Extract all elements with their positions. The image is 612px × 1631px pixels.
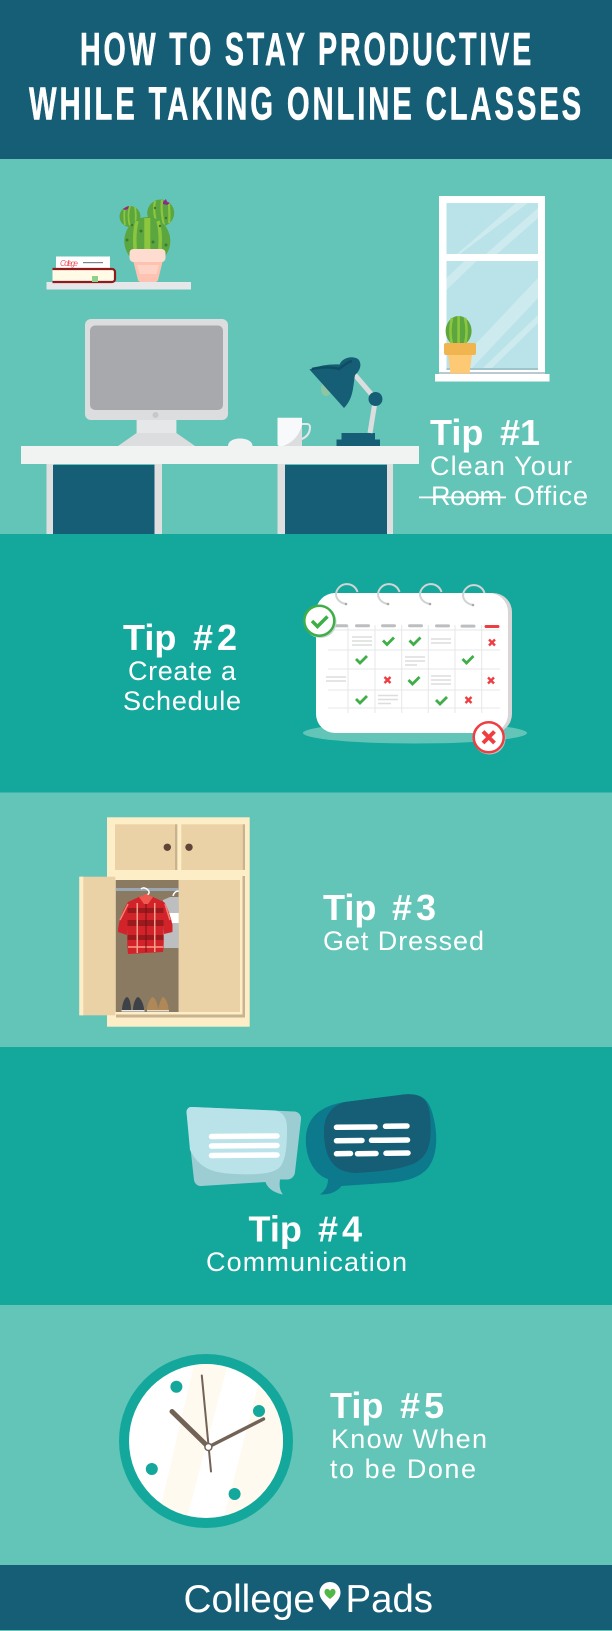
icon: light speech bubble <box>186 1107 301 1194</box>
shoes <box>122 997 169 1012</box>
panel: tip 3 get dressed <box>0 792 612 1047</box>
text: tip 1: Clean Your <box>430 451 572 481</box>
logo: CollegePads: Pads <box>346 1578 433 1621</box>
text: tip 5 <box>330 1385 487 1484</box>
text: tip 2: Schedule <box>123 686 241 716</box>
icon: desk <box>21 446 419 535</box>
icon: computer monitor <box>85 319 228 446</box>
red plaid shirt <box>118 888 172 954</box>
text: tip 3: Tip <box>323 887 376 928</box>
icon: wall shelf with books and cactus: College <box>60 259 79 268</box>
calendar check marks <box>356 638 474 704</box>
text: tip 5: Know When <box>331 1424 487 1454</box>
calendar x marks <box>384 640 495 703</box>
logo: CollegePads: College <box>184 1578 315 1621</box>
icon: green check badge <box>304 606 336 638</box>
text: tip 4 <box>206 1208 407 1277</box>
icon: wall clock <box>119 1354 293 1528</box>
panel: tip 1 clean your office <box>0 159 612 535</box>
calendar rings <box>336 584 484 606</box>
icon: wall shelf with books and cactus <box>46 199 191 290</box>
text: tip 4: Tip <box>248 1208 302 1250</box>
calendar grid <box>328 625 500 713</box>
text: tip 2 <box>123 617 241 716</box>
footer band <box>0 1565 612 1631</box>
icon: red x badge <box>474 722 506 754</box>
logo: CollegePads <box>184 1578 433 1621</box>
calendar day headers <box>333 624 500 628</box>
text: tip 1: Room <box>431 481 502 511</box>
clock hands <box>172 1376 264 1472</box>
icon: computer mouse <box>228 438 252 446</box>
clock dots <box>146 1381 265 1500</box>
icon: coffee mug <box>278 418 310 446</box>
text: tip 1: Office <box>514 481 588 511</box>
text: tip 3 <box>323 887 484 956</box>
panel: tip 5 know when to be done <box>119 1354 486 1528</box>
panel: tip 4 communication <box>0 1047 612 1305</box>
text: tip 5: #5 <box>400 1385 448 1426</box>
header band <box>0 0 612 159</box>
icon: wardrobe <box>79 817 250 1027</box>
text: tip 1 <box>419 412 588 511</box>
open wardrobe door <box>79 877 115 1015</box>
icon: desk lamp <box>310 357 382 446</box>
text: tip 3: #3 <box>392 887 440 928</box>
text: tip 5: Tip <box>330 1385 383 1426</box>
panel: tip 2 create a schedule <box>0 534 612 792</box>
text: tip 2: #2 <box>193 617 241 658</box>
icon: window with small cactus <box>435 196 550 382</box>
icon: dark speech bubble <box>306 1094 436 1195</box>
text: tip 4: Communication <box>206 1247 407 1277</box>
text: tip 1: Tip <box>430 412 483 453</box>
text: tip 3: Get Dressed <box>323 926 484 956</box>
grey shirt <box>163 891 179 948</box>
text: tip 4: #4 <box>318 1208 366 1250</box>
calendar note lines <box>326 637 451 704</box>
text: tip 1: #1 <box>500 412 540 453</box>
text: tip 5: to be Done <box>330 1454 476 1484</box>
icon: calendar <box>303 584 527 754</box>
closet rail <box>116 888 179 891</box>
text: tip 2: Create a <box>128 656 237 686</box>
text: tip 2: Tip <box>123 617 176 658</box>
